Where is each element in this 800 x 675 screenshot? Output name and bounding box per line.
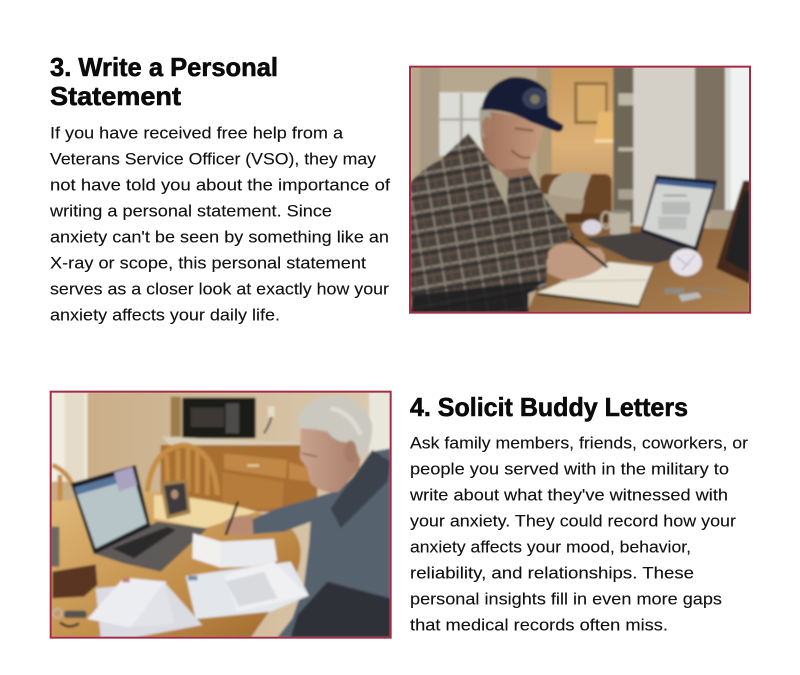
laptop: [71, 465, 207, 572]
photo: older man writing at kitchen table with laptop and letters: [51, 392, 391, 638]
photo border: [51, 392, 391, 638]
text block: buddy letters explanation: [409, 434, 749, 634]
stack of envelopes: [87, 578, 202, 638]
picture frame: [716, 181, 750, 284]
open letter and envelope: [186, 562, 309, 619]
laptop: [585, 175, 717, 263]
heading: 4. Solicit Buddy Letters: 4. Solicit Buddy Letters: [410, 392, 688, 422]
veteran: navy cap: [481, 77, 563, 132]
text block: personal statement explanation: X-ray or scope, this personal statement: [50, 254, 366, 272]
veteran: head: [479, 107, 547, 178]
wooden chair: [147, 445, 217, 495]
wallet and mug: [51, 527, 97, 598]
man: gray shirt: [251, 448, 391, 638]
coffee mug: [601, 210, 630, 235]
heading: 3. Write a Personal Statement: [50, 52, 278, 111]
text block: personal statement explanation: Veterans Service Officer (VSO), they may: [50, 150, 377, 168]
table: [51, 492, 301, 638]
text block: personal statement explanation: anxiety can't be seen by something like an: [50, 228, 389, 246]
dog tags and keys: [664, 288, 730, 302]
text block: personal statement explanation: not have told you about the importance of: [50, 176, 390, 194]
text block: buddy letters explanation: that medical records often miss.: [410, 616, 668, 634]
hand and pen: [224, 502, 253, 536]
text block: personal statement explanation: If you have received free help from a: [50, 124, 344, 142]
text block: personal statement explanation: serves as a closer look at exactly how your: [50, 280, 390, 298]
framed photo: [160, 479, 191, 519]
text block: buddy letters explanation: people you served with in the military to: [410, 460, 729, 478]
keys and tags: [53, 609, 87, 626]
notebook: [536, 262, 654, 307]
sofa in background: [540, 172, 612, 223]
heading: 3. Write a Personal Statement: 3. Write a Personal: [50, 52, 278, 82]
text block: buddy letters explanation: personal insights fill in even more gaps: [410, 590, 722, 608]
photo border: [410, 67, 750, 313]
text block: personal statement explanation: anxiety affects your daily life.: [50, 306, 280, 324]
text block: personal statement explanation: [49, 124, 390, 324]
text block: buddy letters explanation: write about what they've witnessed with: [409, 486, 728, 504]
heading: 3. Write a Personal Statement: Statement: [50, 81, 181, 111]
text block: buddy letters explanation: reliability, and relationships. These: [410, 564, 694, 582]
man: head and hair: [297, 396, 372, 492]
text block: personal statement explanation: writing a personal statement. Since: [49, 202, 332, 220]
desk: [527, 223, 750, 313]
veteran: plaid shirt: [410, 133, 575, 313]
text block: buddy letters explanation: your anxiety. They could record how your: [410, 512, 737, 530]
text block: buddy letters explanation: Ask family members, friends, coworkers, or: [410, 434, 749, 452]
veteran: writing hand and pen: [547, 237, 607, 280]
microwave: [182, 398, 256, 438]
crumpled paper balls: [582, 220, 702, 276]
text block: buddy letters explanation: anxiety affects your mood, behavior,: [410, 538, 691, 556]
letter on table: [192, 533, 277, 568]
photo: veteran in cap writing a personal statement at a desk: [410, 67, 750, 313]
counter and cabinets: [161, 437, 317, 512]
